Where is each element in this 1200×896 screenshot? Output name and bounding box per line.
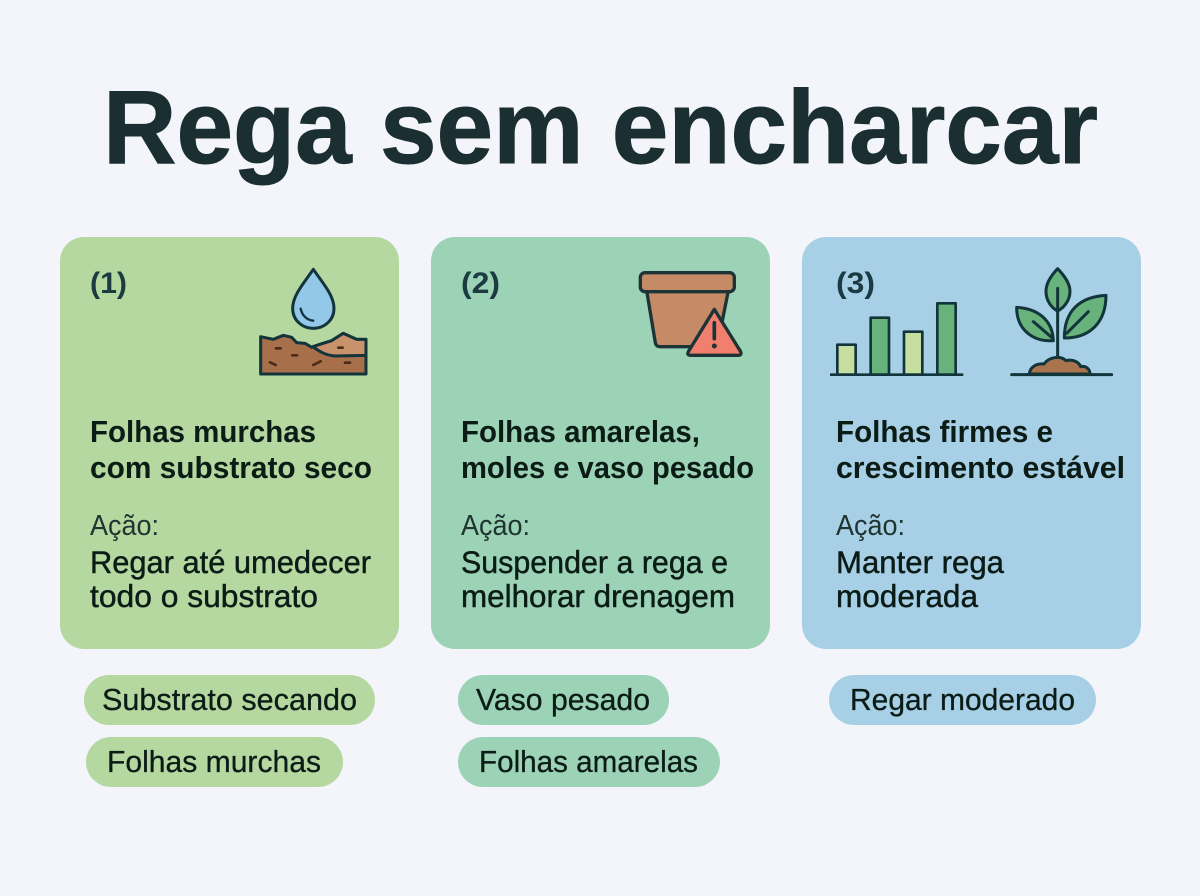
icon: plant sprout xyxy=(1012,269,1112,375)
heading card 1: com substrato seco xyxy=(90,450,372,485)
action text card 2 xyxy=(461,544,735,614)
action text card 2: Suspender a rega e xyxy=(461,544,728,580)
step number 3: (3) xyxy=(836,267,875,300)
heading card 3: crescimento estável xyxy=(836,450,1125,485)
chip: Substrato secando: Substrato secando xyxy=(102,683,357,717)
heading card 2 xyxy=(461,414,754,485)
chip: Folhas amarelas: Folhas amarelas xyxy=(479,745,698,779)
icon: bar chart xyxy=(830,303,963,375)
chip: Folhas murchas: Folhas murchas xyxy=(107,745,321,779)
panel: card 3 xyxy=(802,237,1141,649)
action text card 1: Regar até umedecer xyxy=(90,544,371,580)
action text card 3: Manter rega xyxy=(836,544,1004,580)
heading card 3: Folhas firmes e xyxy=(836,414,1053,449)
heading card 2: moles e vaso pesado xyxy=(461,450,754,485)
panel: card 1 xyxy=(60,237,399,649)
chip: Substrato secando xyxy=(84,675,375,725)
heading card 1 xyxy=(90,414,372,485)
chip: Vaso pesado xyxy=(458,675,669,725)
action text card 1 xyxy=(90,544,371,614)
chip: Folhas murchas xyxy=(86,737,343,787)
action label card 1: Ação: xyxy=(90,510,159,542)
icon: water drop over soil xyxy=(261,269,366,374)
heading card 3 xyxy=(836,414,1125,485)
action text card 3: moderada xyxy=(836,578,978,614)
panel: card 2 xyxy=(431,237,770,649)
step number 1: (1) xyxy=(90,267,127,300)
action text card 2: melhorar drenagem xyxy=(461,578,735,614)
heading card 2: Folhas amarelas, xyxy=(461,414,700,449)
action label card 2: Ação: xyxy=(461,510,530,542)
action label card 3: Ação: xyxy=(836,510,905,542)
chip: Regar moderado xyxy=(829,675,1096,725)
action text card 1: todo o substrato xyxy=(90,578,318,614)
icon: pot with warning xyxy=(640,273,741,355)
action text card 3 xyxy=(836,544,1004,614)
step number 2: (2) xyxy=(461,267,500,300)
chip: Regar moderado: Regar moderado xyxy=(850,683,1075,717)
heading card 1: Folhas murchas xyxy=(90,414,316,449)
chip: Folhas amarelas xyxy=(458,737,720,787)
chip: Vaso pesado: Vaso pesado xyxy=(476,683,650,717)
title: Rega sem encharcar xyxy=(103,70,1098,186)
